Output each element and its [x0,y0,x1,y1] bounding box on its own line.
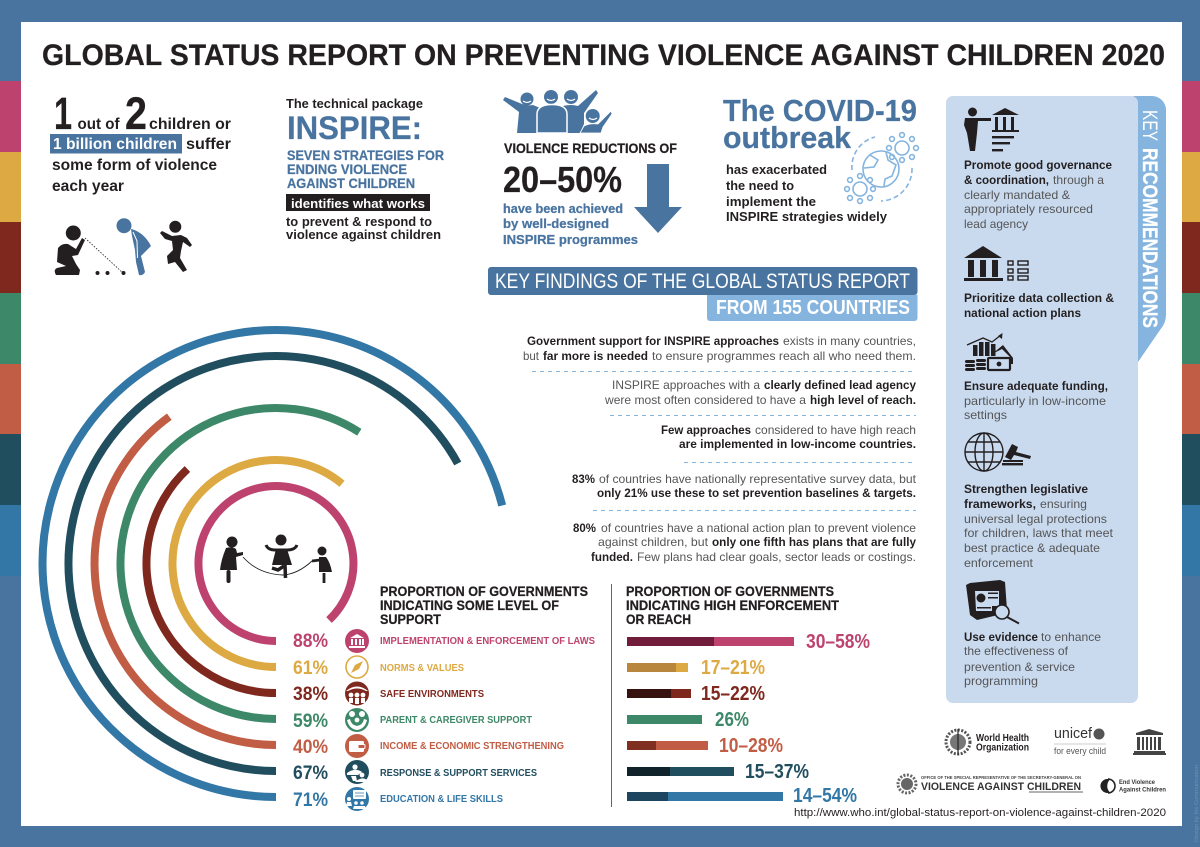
recommendation 1 text [964,158,1112,231]
recommendation 1 text: clearly mandated & [964,188,1070,202]
INSPIRE text block: The technical package [286,96,423,111]
key findings list: to ensure programmes reach all who need them. [652,349,916,363]
row: implementation and enforcement of laws: 88% [293,631,328,652]
recommendation 4 text: universal legal protections [964,512,1107,526]
recommendation 3 text: particularly in low-income [964,394,1106,408]
bar: income 10-28%: 10–28% [719,735,783,757]
key findings list: of countries have a national action plan to prevent violence [601,521,916,535]
row: parent and caregiver support: 59% [293,711,328,732]
key findings list: are implemented in low-income countries. [679,437,916,451]
heading: some level of support: SUPPORT [380,612,442,627]
key findings list: only 21% use these to set prevention baselines & targets. [597,486,916,500]
INSPIRE text block: to prevent & respond to [286,214,432,229]
recommendation 2 text: national action plans [964,306,1081,320]
row: parent and caregiver support [293,708,533,732]
stat: 1 out of 2 children: 1 billion children [53,136,177,153]
row: parent and caregiver support: PARENT & CAREGIVER SUPPORT [380,714,533,726]
row: education and life skills: 71% [293,790,328,811]
icon: globe and viruses [845,133,918,203]
INSPIRE text block: identifies what works [291,196,425,211]
title: GLOBAL STATUS REPORT ON PREVENTING VIOLENCE AGAINST CHILDREN 2020 [42,39,1165,72]
source url: http://www.who.int/global-status-report-on-violence-against-children-2020 [794,807,1166,819]
icon: funding [965,333,1013,371]
key findings list: against children, but [598,535,709,549]
logo: End Violence Against Children: Against Children [1119,786,1166,794]
key findings list: of countries have nationally representative survey data, but [599,472,917,486]
recommendation 5 text: prevention & service [964,660,1075,674]
row: income and economic strengthening: 40% [293,737,328,758]
COVID-19 block [723,93,917,224]
stat: 1 out of 2 children: 1 [54,88,72,139]
stat: violence reductions: 20–50% [503,159,622,200]
key findings list: only one fifth has plans that are fully [712,535,916,549]
bar: laws 30-58% [627,631,870,653]
bar: parent support 26%: 26% [715,709,749,731]
stat: 1 out of 2 children: children or [149,116,231,133]
COVID-19 block: The COVID-19 [723,93,917,128]
recommendation 1 text: through a [1053,173,1104,187]
logo: World Health Organization [946,729,1029,755]
heading: high enforcement or reach [626,584,840,627]
row: education and life skills [293,787,503,811]
key findings list: clearly defined lead agency [764,378,916,392]
recommendation 4 text [964,482,1114,570]
stat: violence reductions: VIOLENCE REDUCTIONS OF [504,141,677,156]
logo: End Violence Against Children [1100,779,1166,794]
stat: 1 out of 2 children: suffer [186,136,231,153]
recommendation 4 text: Strengthen legislative [964,482,1088,496]
bar: response 15-37% [627,761,809,783]
icon: person and institution [964,108,1019,151]
bar: safe environments 15-22%: 15–22% [701,683,765,705]
logo text: office of the SRSG on violence against children: OFFICE OF THE SPECIAL REPRESENTATIVE OF THE SECRETARY-GENERAL ON [921,775,1081,781]
bar: response 15-37%: 15–37% [745,761,809,783]
arrow: down [634,164,682,233]
logo: UNICEF: for every child [1054,746,1106,756]
bar: income 10-28% [627,735,783,757]
chart: radial arcs of government support [43,330,502,797]
stat: violence reductions [503,141,677,247]
row: norms and values: NORMS & VALUES [380,662,464,674]
recommendation 4 text: best practice & adequate [964,541,1100,555]
INSPIRE text block: violence against children [286,227,441,242]
icon: institution and checklist [964,246,1028,281]
INSPIRE text block: ENDING VIOLENCE [287,162,407,177]
logo: End Violence Against Children: End Violence [1119,779,1155,786]
recommendation 4 text: ensuring [1040,497,1087,511]
stat: violence reductions: INSPIRE programmes [503,232,638,247]
bar: parent support 26% [627,709,749,731]
stat: 1 out of 2 children: 2 [125,88,147,139]
key findings list: far more is needed [543,349,648,363]
key findings list: but [523,349,540,363]
key findings list: considered to have high reach [755,423,916,437]
bar: education 14-54%: 14–54% [793,785,857,807]
INSPIRE text block [286,96,444,242]
heading: high enforcement or reach: PROPORTION OF GOVERNMENTS [626,584,834,599]
recommendation 1 text: lead agency [964,217,1028,231]
logo: UNESCO [1133,729,1166,755]
INSPIRE text block: SEVEN STRATEGIES FOR [287,148,444,163]
recommendation 3 text: settings [964,408,1007,422]
stat: 1 out of 2 children [50,88,231,195]
recommendation 3 text [964,379,1108,422]
row: safe environments: 38% [293,684,328,705]
key findings list: funded. [591,550,633,564]
row: safe environments [293,682,484,706]
logo text: office of the SRSG on violence against children [921,775,1083,793]
row: response and support services [293,760,537,784]
key findings list: high level of reach. [810,393,916,407]
row: implementation and enforcement of laws: IMPLEMENTATION & ENFORCEMENT OF LAWS [380,635,595,647]
bar: safe environments 15-22% [627,683,765,705]
tab label: key recommendations: KEY [1138,110,1161,141]
COVID-19 block: outbreak [723,120,852,155]
row: norms and values: 61% [293,658,328,679]
key findings list: Few approaches [661,423,751,437]
stat: 1 out of 2 children: some form of violence [52,157,217,174]
tab label: key recommendations: RECOMMENDATIONS [1138,148,1161,328]
recommendation 1 text: & coordination, [964,173,1049,187]
recommendation 2 text [964,291,1114,320]
INSPIRE text block: AGAINST CHILDREN [287,176,415,191]
COVID-19 block: the need to [726,178,794,193]
row: safe environments: SAFE ENVIRONMENTS [380,688,484,700]
recommendation 5 text [964,630,1101,688]
heading: some level of support: PROPORTION OF GOVERNMENTS [380,584,588,599]
bar: norms 17-21%: 17–21% [701,657,765,679]
logo: World Health Organization: World Health [976,732,1029,744]
recommendation 3 text: Ensure adequate funding, [964,379,1108,393]
recommendation 5 text: programming [964,674,1038,688]
key findings list: Few plans had clear goals, sector leads or costings. [637,550,916,564]
COVID-19 block: implement the [726,194,816,209]
stat: violence reductions: by well-designed [503,216,609,231]
row: response and support services: 67% [293,763,328,784]
recommendation 1 text: appropriately resourced [964,202,1093,216]
row: implementation and enforcement of laws [293,629,595,653]
INSPIRE text block: INSPIRE: [287,110,422,146]
logo: UNICEF: unicef [1054,725,1093,742]
COVID-19 block: INSPIRE strategies widely [726,209,888,224]
icon: children skipping rope [220,534,332,583]
key findings list: exists in many countries, [783,334,916,348]
recommendation 4 text: enforcement [964,556,1034,570]
bar: laws 30-58%: 30–58% [806,631,870,653]
heading: some level of support [380,584,588,627]
banner: key findings: KEY FINDINGS OF THE GLOBAL STATUS REPORT [495,270,910,293]
logo: UN emblem [898,775,916,793]
bar: norms 17-21% [627,657,765,679]
COVID-19 block: has exacerbated [726,162,827,177]
recommendation 4 text: for children, laws that meet [964,526,1114,540]
stat: 1 out of 2 children: out of [78,116,120,133]
panel: key recommendations [946,96,1166,703]
key findings list: were most often considered to have a [604,393,806,407]
key findings list: Government support for INSPIRE approaches [527,334,779,348]
icon: happy family [503,90,612,133]
banner: key findings: FROM 155 COUNTRIES [716,297,910,319]
stat: violence reductions: have been achieved [503,201,623,216]
heading: high enforcement or reach: INDICATING HIGH ENFORCEMENT [626,598,840,613]
key findings list: 83% [572,472,595,486]
logo text: office of the SRSG on violence against children: VIOLENCE AGAINST CHILDREN [921,781,1081,793]
key findings list: 80% [573,521,596,535]
recommendation 5 text: the effectiveness of [964,644,1069,658]
stat: 1 out of 2 children: each year [52,178,124,195]
banner: key findings [488,267,918,321]
icon: evidence report and magnifier [966,580,1019,624]
key findings list: INSPIRE approaches with a [612,378,760,392]
icon: globe and gavel [965,433,1031,471]
key findings list [523,334,917,564]
row: response and support services: RESPONSE & SUPPORT SERVICES [380,767,537,779]
bar: education 14-54% [627,785,857,807]
row: income and economic strengthening: INCOME & ECONOMIC STRENGTHENING [380,740,564,752]
row: norms and values [293,656,464,679]
recommendation 1 text: Promote good governance [964,158,1112,172]
logo: UNICEF [1054,725,1106,756]
logo: World Health Organization: Organization [976,742,1029,754]
recommendation 5 text: to enhance [1041,630,1101,644]
icon: children bullying scene [55,218,192,275]
recommendation 2 text: Prioritize data collection & [964,291,1114,305]
row: education and life skills: EDUCATION & LIFE SKILLS [380,793,503,805]
recommendation 5 text: Use evidence [964,630,1038,644]
heading: some level of support: INDICATING SOME LEVEL OF [380,598,559,613]
heading: high enforcement or reach: OR REACH [626,612,691,627]
row: income and economic strengthening [293,734,564,758]
design credit: Design by Iris Communication [1194,765,1200,842]
recommendation 4 text: frameworks, [964,497,1036,511]
